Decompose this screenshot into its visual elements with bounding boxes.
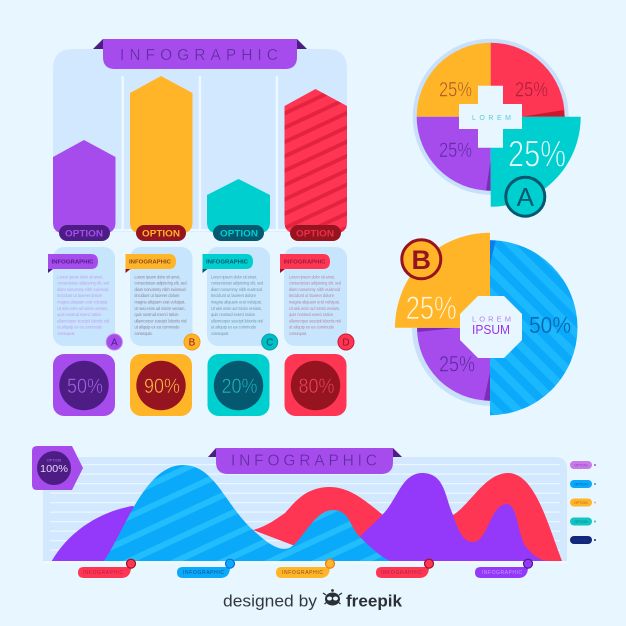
marker label: purple: INFOGRAPHIC (482, 570, 522, 576)
card C: Ut wisi enim ad minim veniam, (211, 306, 262, 311)
card C: ut aliquip ex ea commodo (211, 325, 257, 330)
badge: option 100%: OPTION (47, 458, 62, 462)
centre cross label (459, 86, 522, 148)
centre cross label: LOREM (472, 115, 511, 122)
card A: consequat. (57, 331, 75, 336)
badge: option 100% (32, 446, 83, 490)
credit: designed by freepik (223, 589, 403, 610)
heading ribbon (208, 448, 402, 474)
card C: C (266, 338, 273, 348)
card B: quis nostrud exerci tation (134, 312, 179, 317)
marker label: red (78, 559, 136, 578)
badge B (402, 240, 441, 279)
legend: OPTION (574, 463, 588, 467)
card D: diam nonummy nibh euismod (289, 287, 341, 292)
marker label: red right (376, 559, 434, 578)
card A: tincidunt ut laoreet dolore (57, 293, 103, 298)
stat tile: 50%: 50% (67, 375, 103, 398)
slice: purple: 25% (439, 352, 475, 377)
badge B: B (412, 245, 431, 275)
bar: teal: OPTION (220, 228, 258, 238)
legend: OPTION (574, 520, 588, 524)
card B: tincidunt ut laoreet dolore (134, 293, 180, 298)
area: red middle (253, 487, 395, 561)
card D: consequat. (289, 331, 307, 336)
card D: tincidunt ut laoreet dolore (289, 293, 335, 298)
marker label: red right: INFOGRAPHIC (381, 570, 422, 576)
card D: ut aliquip ex ea commodo (289, 325, 335, 330)
bar: red striped: OPTION (296, 228, 334, 238)
centre octagon label (460, 296, 522, 358)
slice: orange: 25% (439, 79, 472, 102)
stat tile: 20%: 20% (222, 375, 258, 398)
pie chart A (413, 39, 581, 216)
area: blue striped (104, 465, 390, 561)
card C: quis nostrud exerci tation (211, 312, 256, 317)
stat tile: 50% (53, 354, 115, 416)
card C: Lorem ipsum dolor sit amet, (211, 274, 257, 279)
marker label: blue: INFOGRAPHIC (183, 570, 224, 576)
card A: diam nonummy nibh euismod (57, 287, 109, 292)
credit: designed by freepik: designed by (223, 592, 318, 610)
bar: purple: OPTION (65, 228, 103, 238)
bar: red striped (284, 89, 347, 241)
card D: INFOGRAPHIC (284, 260, 326, 266)
slice: red: 25% (515, 79, 548, 102)
centre octagon label: IPSUM (472, 322, 510, 337)
card B: magna aliquam erat volutpat. (134, 300, 186, 304)
card B: diam nonummy nibh euismod (134, 287, 186, 292)
slice: purple: 25% (439, 139, 472, 162)
card D: consectetuer adipiscing elit, sed (289, 281, 342, 286)
legend (570, 461, 596, 544)
card D: quis nostrud exerci tation (289, 312, 334, 317)
icon: freepik bee (323, 589, 342, 606)
slice: teal exploded: 25% (508, 134, 566, 175)
card B: consequat. (134, 331, 152, 336)
card A: quis nostrud exerci tation (57, 312, 102, 317)
card A: A (111, 338, 118, 348)
card C: INFOGRAPHIC (206, 260, 248, 266)
panel: area chart (32, 446, 568, 564)
card A: ullamcorper suscipit lobortis nisl (57, 318, 109, 323)
card A: ut aliquip ex ea commodo (57, 325, 103, 330)
stat tile: 20% (208, 354, 270, 416)
legend: OPTION (574, 538, 588, 542)
card C: consectetuer adipiscing elit, sed (211, 281, 264, 286)
card D: D (342, 338, 350, 348)
centre octagon label: LOREM (472, 315, 511, 324)
slice: teal exploded (491, 117, 581, 207)
legend: OPTION (574, 501, 588, 505)
marker label: blue (177, 559, 234, 578)
card A: consectetuer adipiscing elit, sed (57, 281, 110, 286)
area: red right (440, 473, 562, 561)
slice: orange (417, 43, 491, 117)
card B: INFOGRAPHIC (129, 260, 171, 266)
card B: consectetuer adipiscing elit, sed (134, 281, 187, 286)
slice: purple (417, 328, 490, 401)
card D: magna aliquam erat volutpat. (289, 300, 340, 304)
bar: orange: OPTION (142, 228, 180, 238)
card B: B (189, 338, 196, 348)
card D: ullamcorper suscipit lobortis nisl (289, 318, 341, 323)
slice: red (491, 43, 565, 117)
bar: purple (53, 140, 116, 241)
slice: orange exploded (395, 233, 490, 328)
marker label: orange (276, 559, 334, 578)
stat tile: 90%: 90% (144, 375, 180, 398)
marker label: purple (475, 559, 532, 578)
area: purple left (52, 506, 300, 561)
marker label: orange: INFOGRAPHIC (282, 570, 323, 576)
pie chart B (395, 233, 578, 415)
card B: ullamcorper suscipit lobortis nisl (134, 318, 187, 323)
bar: teal (207, 179, 270, 241)
heading ribbon: INFOGRAPHIC (120, 47, 278, 64)
bar: orange (130, 76, 192, 241)
card A: INFOGRAPHIC (52, 260, 94, 266)
card D: Lorem ipsum dolor sit amet, (289, 274, 335, 279)
card C: diam nonummy nibh euismod (211, 287, 263, 292)
slice: purple (417, 117, 491, 191)
heading ribbon (93, 39, 307, 69)
card D: Ut wisi enim ad minim veniam, (289, 306, 340, 311)
marker label: red: INFOGRAPHIC (83, 570, 123, 576)
badge: option 100%: 100% (40, 464, 68, 475)
card A (48, 247, 122, 350)
badge A (506, 177, 545, 216)
credit: designed by freepik: freepik (346, 592, 403, 610)
card C: ullamcorper suscipit lobortis nisl (211, 318, 263, 323)
slice: blue striped (490, 240, 578, 415)
card B: ut aliquip ex ea commodo (134, 325, 180, 330)
stat tile: 80% (284, 354, 346, 416)
card A: Lorem ipsum dolor sit amet, (57, 274, 103, 279)
slice: orange exploded: 25% (406, 290, 457, 326)
card D (280, 247, 354, 350)
area: purple right (340, 473, 549, 561)
card B (126, 247, 200, 350)
card C: consequat. (211, 331, 229, 336)
stat tile: 90% (130, 354, 192, 416)
card B: Lorem ipsum dolor sit amet, (134, 274, 180, 279)
heading ribbon: INFOGRAPHIC (231, 453, 377, 470)
badge A: A (517, 182, 535, 212)
card C: tincidunt ut laoreet dolore (211, 293, 257, 298)
card C (202, 247, 278, 350)
card B: Ut wisi enim ad minim veniam, (134, 306, 186, 311)
legend: OPTION (574, 482, 588, 486)
card C: magna aliquam erat volutpat. (211, 300, 262, 304)
panel: bar chart (53, 39, 347, 241)
card A: magna aliquam erat volutpat. (57, 300, 108, 304)
slice: blue striped: 50% (529, 312, 571, 338)
card A: Ut wisi enim ad minim veniam, (57, 306, 108, 311)
stat tile: 80%: 80% (298, 375, 334, 398)
